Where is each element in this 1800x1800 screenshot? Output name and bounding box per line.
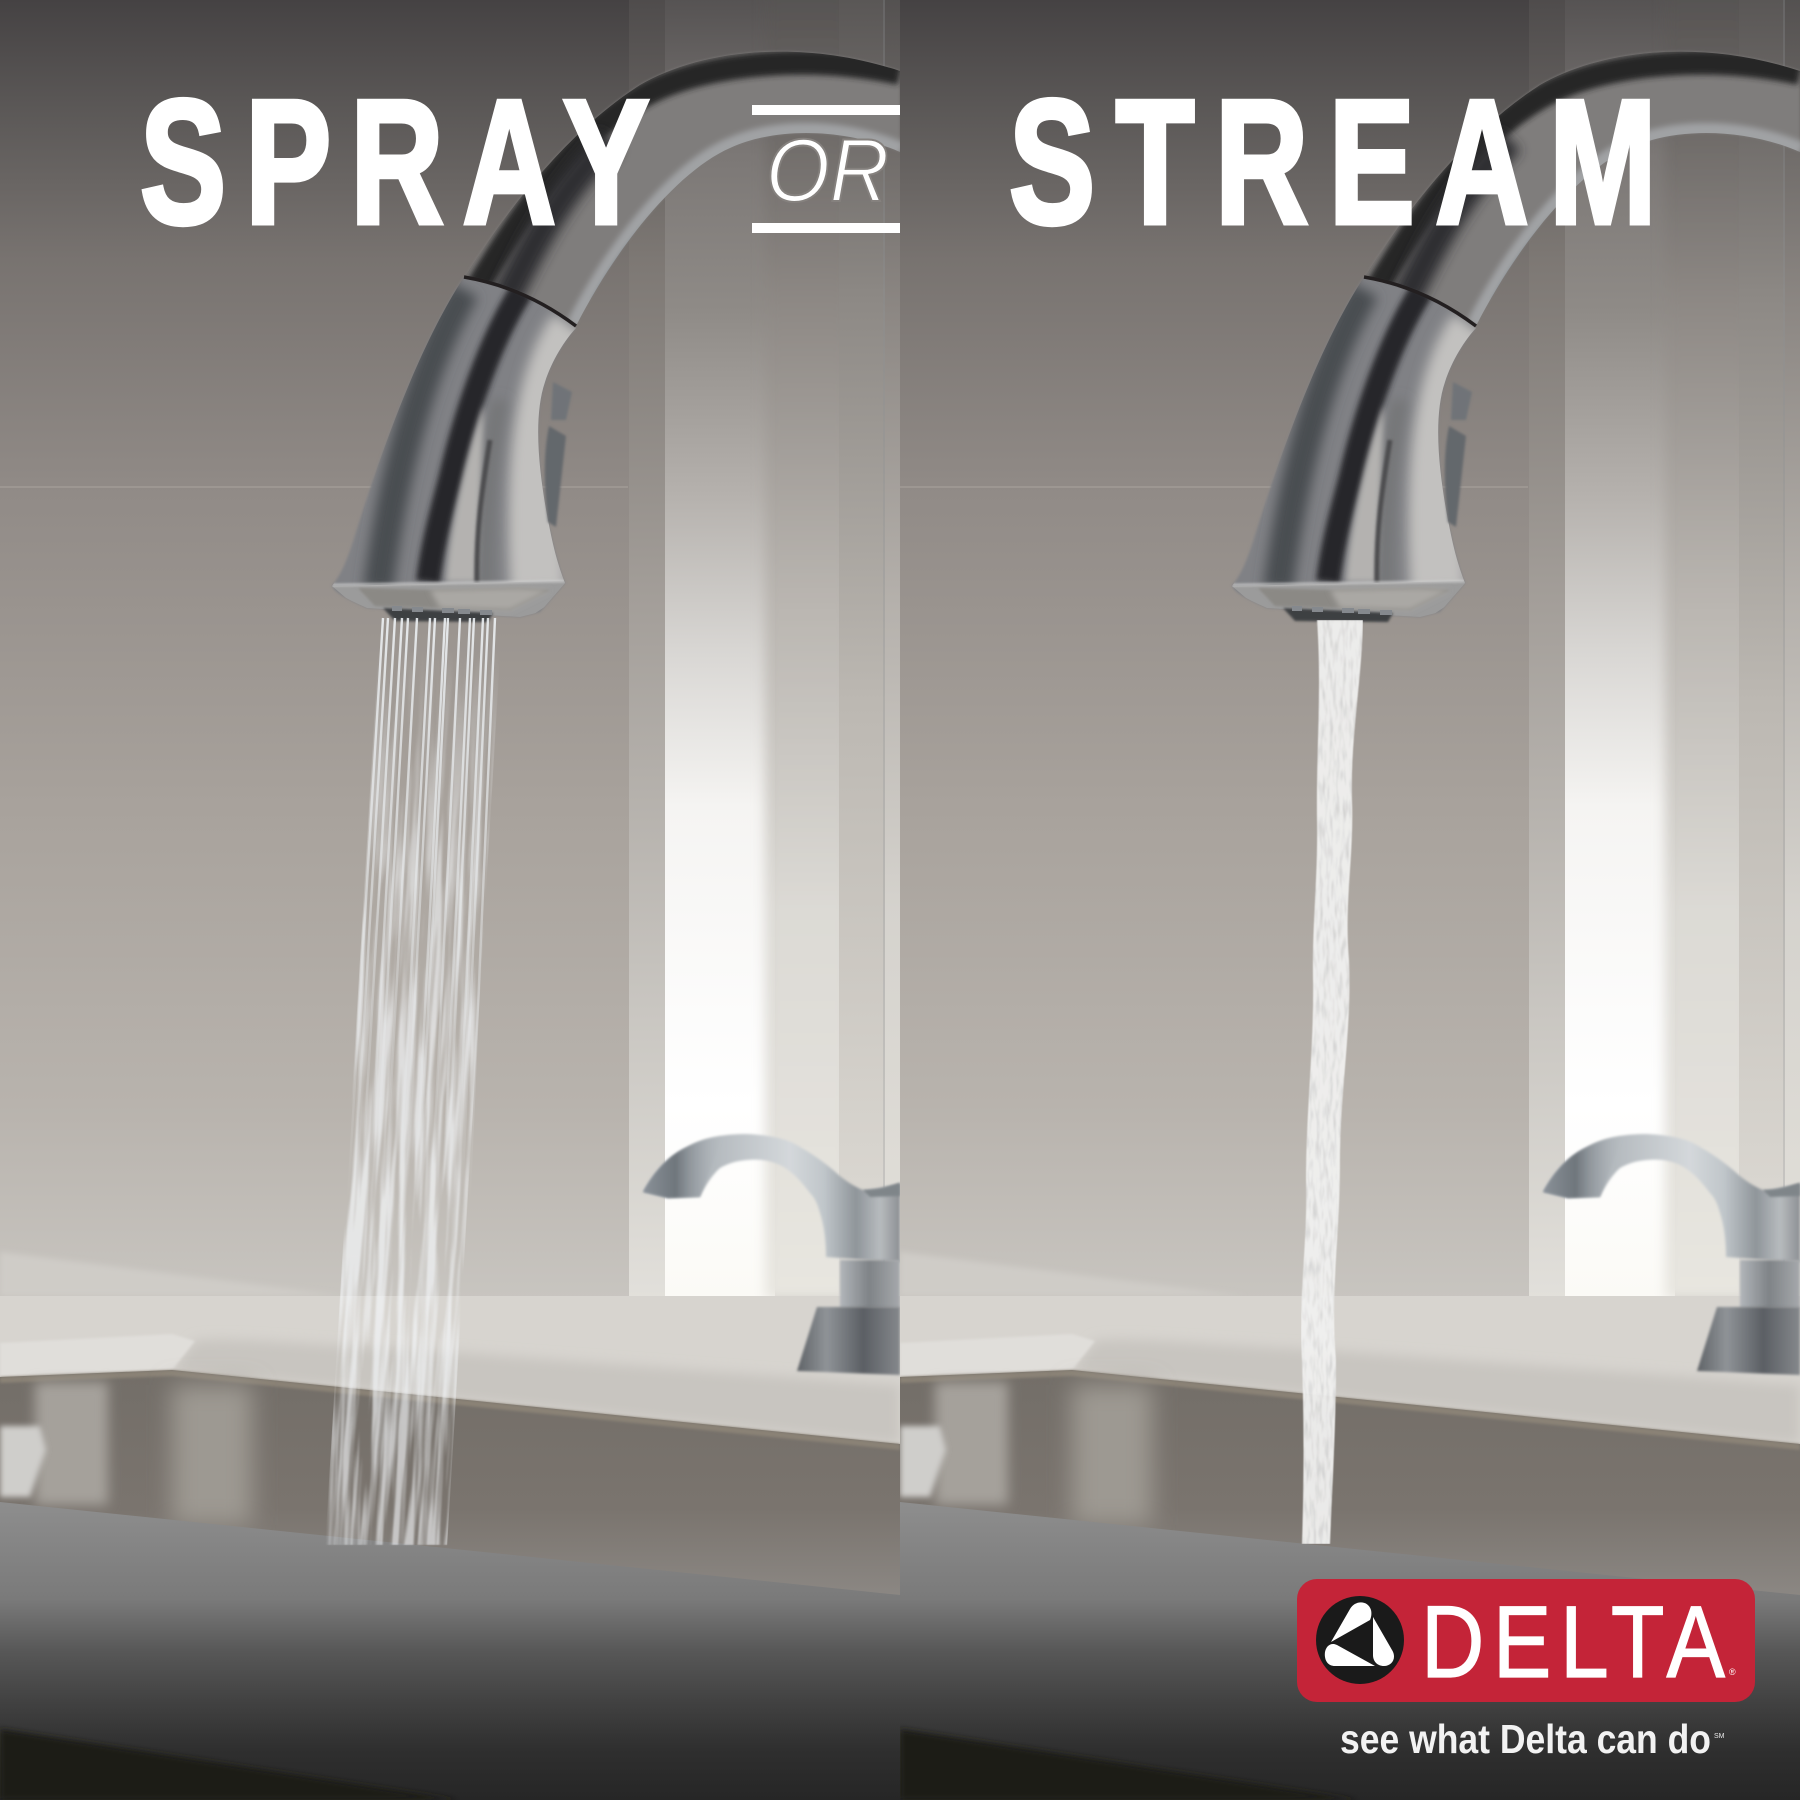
heading: STREAM: STREAM (1009, 63, 1677, 261)
water: spray (325, 618, 500, 1545)
heading: OR with rules: OR (766, 120, 889, 220)
icon: Delta triangle mark (1316, 1596, 1404, 1684)
tagline: see what Delta can do (1340, 1716, 1711, 1762)
wordmark: DELTA: DELTA (1421, 1586, 1734, 1700)
logo: Delta badge (1297, 1579, 1755, 1702)
registered mark: ® (1729, 1667, 1736, 1677)
heading: SPRAY: SPRAY (140, 63, 668, 261)
water: stream (1301, 620, 1363, 1544)
panel: spray scene (0, 0, 900, 1800)
panel: stream scene (900, 0, 1800, 1800)
tagline: SM (1714, 1733, 1725, 1740)
